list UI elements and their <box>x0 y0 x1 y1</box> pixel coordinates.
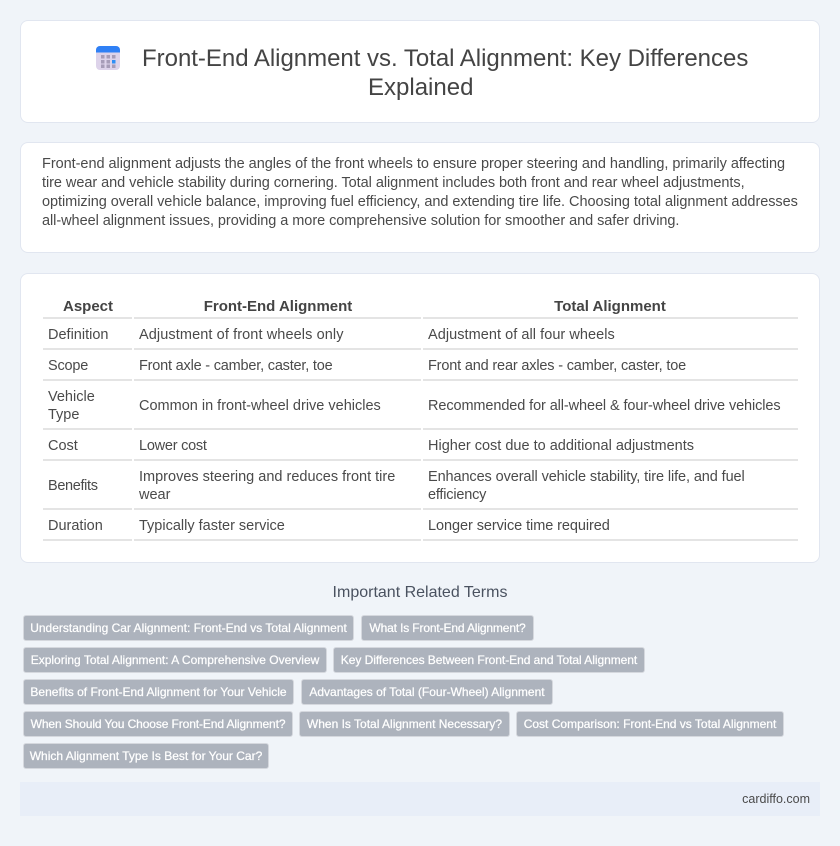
related terms tags: When Is Total Alignment Necessary? <box>307 717 502 731</box>
intro text panel: optimizing overall vehicle balance, improving fuel efficiency, and extending tire life. Choosing total alignment addresses <box>42 194 798 210</box>
title card: Explained <box>368 74 473 101</box>
icon: calendar <box>96 46 120 70</box>
related terms tags: Advantages of Total (Four-Wheel) Alignment <box>309 685 545 699</box>
comparison table panel: Typically faster service <box>139 518 285 534</box>
comparison table panel: wear <box>139 487 170 503</box>
related terms tags: Exploring Total Alignment: A Comprehensive Overview <box>31 653 319 667</box>
row: scope: Scope <box>48 358 88 374</box>
comparison table panel: Common in front-wheel drive vehicles <box>139 398 381 414</box>
related terms tags: Which Alignment Type Is Best for Your Car? <box>30 749 262 763</box>
title card <box>20 20 820 123</box>
intro text panel <box>20 142 820 253</box>
comparison table panel: Total Alignment <box>554 298 666 315</box>
comparison table panel: Recommended for all-wheel & four-wheel drive vehicles <box>428 398 781 414</box>
comparison table panel: Enhances overall vehicle stability, tire life, and fuel <box>428 469 745 485</box>
table header: Aspect <box>63 298 113 315</box>
footer <box>20 782 820 816</box>
comparison table panel: Higher cost due to additional adjustments <box>428 438 694 454</box>
intro text panel: Front-end alignment adjusts the angles of the front wheels to ensure proper steering and handling, primarily affecting <box>42 156 785 172</box>
intro text panel: all-wheel alignment issues, providing a more comprehensive solution for smoother and safer driving. <box>42 213 679 229</box>
intro text panel: tire wear and vehicle stability during cornering. Total alignment includes both front and rear wheel adjustments, <box>42 175 745 191</box>
related terms heading: Important Related Terms <box>333 584 507 601</box>
comparison table panel: efficiency <box>428 487 486 503</box>
comparison table panel <box>20 273 820 563</box>
related terms tags: Benefits of Front-End Alignment for Your Vehicle <box>30 685 287 699</box>
comparison table panel: Front and rear axles - camber, caster, toe <box>428 358 686 374</box>
comparison table panel: Front axle - camber, caster, toe <box>139 358 332 374</box>
comparison table panel: Longer service time required <box>428 518 610 534</box>
row: definition: Definition <box>48 327 108 343</box>
comparison table panel: Type <box>48 407 79 423</box>
title text: Front-End Alignment vs. Total Alignment: Key Differences <box>142 45 748 72</box>
comparison table panel: Adjustment of all four wheels <box>428 327 615 343</box>
row: duration: Duration <box>48 518 103 534</box>
comparison table panel: Front-End Alignment <box>204 298 352 315</box>
row: benefits: Benefits <box>48 478 98 494</box>
comparison table panel: Improves steering and reduces front tire <box>139 469 395 485</box>
related terms tags: What Is Front-End Alignment? <box>369 621 526 635</box>
related terms tags: When Should You Choose Front-End Alignment? <box>31 717 285 731</box>
footer source text: cardiffo.com <box>742 792 810 806</box>
related terms tags: Cost Comparison: Front-End vs Total Alignment <box>524 717 776 731</box>
related terms tags: Key Differences Between Front-End and Total Alignment <box>341 653 637 667</box>
row: cost: Cost <box>48 438 78 454</box>
related terms tags: Understanding Car Alignment: Front-End vs Total Alignment <box>30 621 347 635</box>
row: vehicle type: Vehicle <box>48 389 95 405</box>
comparison table panel: Lower cost <box>139 438 207 454</box>
comparison table panel: Adjustment of front wheels only <box>139 327 344 343</box>
